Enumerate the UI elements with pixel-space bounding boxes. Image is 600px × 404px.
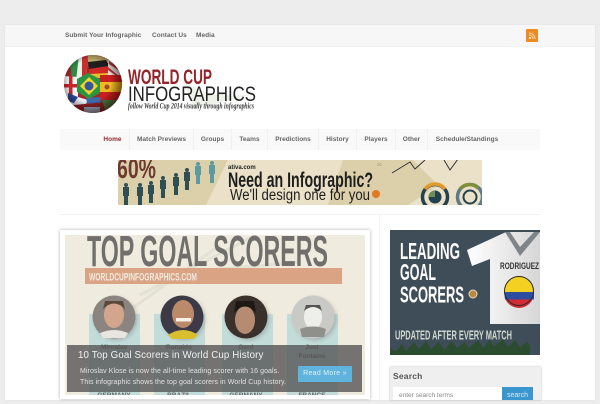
search widget [390, 367, 541, 400]
sidebar heading: GOAL [400, 259, 436, 285]
nav: players [357, 129, 396, 150]
nav: groups: Groups [201, 136, 224, 143]
player names: Just [305, 344, 320, 351]
nav: groups [194, 129, 232, 150]
navigation bar [60, 129, 540, 150]
player names: Ronaldo [166, 344, 192, 351]
nav: players: Players [364, 136, 388, 143]
nav: match previews: Match Previews [137, 136, 186, 143]
caption text: Miroslav Klose is now the all-time leading scorer with 16 goals. [80, 368, 279, 375]
caption text: This infographic shows the top goal scorers in World Cup history. [80, 378, 286, 386]
banner people pictogram [123, 161, 215, 205]
search heading: Search [393, 371, 423, 381]
jersey [467, 232, 540, 324]
caption overlay [67, 345, 362, 392]
image url text: WORLDCUPINFOGRAPHICS.COM [89, 272, 197, 284]
top bar [5, 25, 595, 47]
sidebar arrow icon [469, 290, 477, 298]
nav: teams [232, 129, 268, 150]
banner subline: We'll design one for you [230, 187, 370, 204]
caption text [80, 368, 286, 386]
caption title: 10 Top Goal Scorers in World Cup History [78, 350, 263, 361]
logo tagline: follow World Cup 2014 visually through infographics [128, 102, 254, 110]
nav: schedule: Schedule/Standings [436, 136, 498, 143]
search placeholder: enter search terms [399, 392, 453, 399]
banner axis numbers: 20 [377, 162, 382, 167]
logo title: world cup: WORLD CUP [128, 65, 212, 89]
icon: rss [526, 29, 538, 42]
nav: match previews [130, 129, 194, 150]
nav: history: History [326, 136, 349, 143]
search button [502, 387, 533, 400]
vertical divider [379, 214, 380, 400]
logo title: infographics: INFOGRAPHICS [128, 83, 256, 106]
nav: history [319, 129, 357, 150]
logo [64, 55, 258, 113]
horizontal divider [60, 214, 540, 215]
sidebar heading [400, 238, 464, 308]
banner arrow icon [372, 190, 380, 198]
player portrait 2 [160, 296, 204, 339]
player portrait 3 [224, 296, 268, 338]
search button: search [507, 392, 528, 399]
nav: other [396, 129, 428, 150]
grass [390, 339, 530, 355]
sidebar heading: SCORERS [400, 282, 464, 308]
sidebar heading: LEADING [400, 238, 460, 264]
banner headline: Need an Infographic? [228, 169, 373, 192]
banner small brand: ativa.com [228, 165, 256, 171]
player names: Fontaine [298, 353, 326, 360]
banner chart lines [392, 159, 458, 173]
player portrait 1 [92, 296, 136, 338]
player names [97, 344, 326, 399]
banner donut charts [422, 184, 482, 210]
read more button [298, 366, 352, 382]
player names: Miroslav [101, 344, 128, 351]
logo swoosh [180, 78, 280, 108]
nav: home: Home [103, 136, 122, 143]
advert banner [118, 160, 482, 205]
read more button: Read More » [303, 370, 347, 377]
jersey badge: colombia [504, 276, 534, 308]
nav: other: Other [403, 136, 420, 143]
top link: contact: Contact Us [152, 32, 187, 39]
image url ribbon [85, 268, 342, 284]
portrait shadows [95, 298, 336, 340]
top link: submit: Submit Your Infographic [65, 32, 141, 39]
sidebar advert [390, 230, 540, 355]
nav: home [96, 129, 130, 150]
nav: predictions [268, 129, 319, 150]
nav: predictions: Predictions [275, 136, 311, 143]
top link: media: Media [196, 32, 215, 39]
featured infographic image [65, 235, 365, 395]
player columns [89, 314, 338, 400]
player names: Gerd [238, 344, 254, 351]
search input [393, 387, 502, 400]
featured slider [60, 230, 370, 399]
nav: teams: Teams [239, 136, 260, 143]
icon: flag football [64, 55, 122, 113]
player portrait 4 [292, 296, 334, 338]
brazil hexagon [77, 73, 100, 99]
